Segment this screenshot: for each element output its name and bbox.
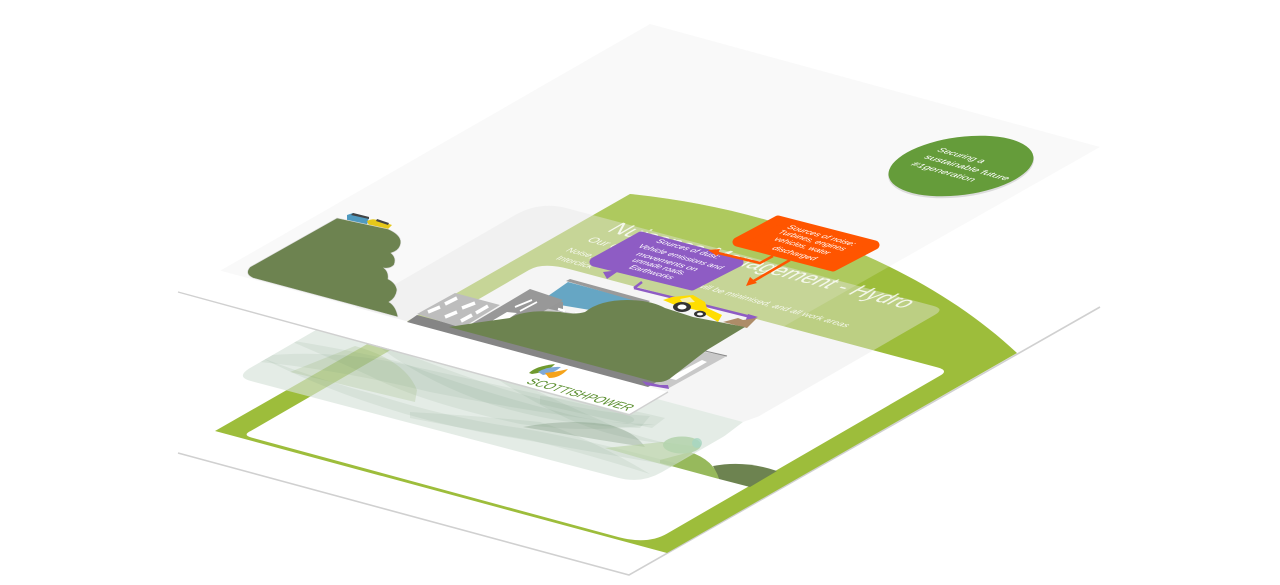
- noise text: Sources of noise:: [784, 224, 859, 248]
- green page layer: [215, 194, 1017, 553]
- ScottishPower logo: [522, 364, 639, 413]
- badge text: Securing a: [934, 147, 989, 165]
- grass panel: [243, 330, 743, 480]
- dust text: Sources of dust:: [653, 238, 723, 260]
- title: Nuisance Management - Hydro: [601, 220, 924, 312]
- orange arrows: [718, 253, 790, 282]
- dust text: [626, 238, 726, 281]
- green layer tint under top sheet: [408, 194, 889, 326]
- dust text: unmade roads.: [629, 257, 689, 277]
- left bush: [248, 218, 401, 317]
- dust text: Earthworks: [626, 264, 677, 281]
- top sheet front edge: [178, 292, 668, 415]
- white content card: [247, 266, 944, 540]
- green circle badge: [884, 128, 1038, 206]
- callout: sources of noise: [737, 220, 875, 267]
- leaf shape left: [290, 346, 417, 402]
- light grey building: [417, 293, 500, 328]
- road: [645, 352, 727, 388]
- grass streaks: [260, 340, 700, 474]
- subheading: Our commit: [584, 236, 655, 259]
- bins behind left bush: [347, 213, 392, 230]
- noise text: vehicles, water: [771, 236, 834, 256]
- noise text: [769, 224, 859, 262]
- water reservoir: [548, 282, 650, 315]
- yellow digger: [663, 295, 722, 322]
- translucent middle panel: [243, 215, 940, 480]
- body text line 2: Interclick: [553, 255, 597, 270]
- top sheet background: [218, 24, 1100, 392]
- hills on green layer: [660, 452, 777, 487]
- white front band of top sheet: [178, 270, 668, 414]
- badge text: [908, 147, 1013, 183]
- panel heading text: [553, 220, 924, 329]
- central bush: [449, 300, 745, 382]
- dust text: Vehicle emissions and: [635, 243, 726, 271]
- bottom page outline: [178, 307, 1100, 575]
- dust text: movements on: [633, 251, 701, 273]
- dark grey building: [466, 289, 563, 332]
- dam wall: [566, 279, 650, 304]
- badge text: #1generation: [908, 161, 979, 183]
- purple site boundary: [634, 288, 755, 318]
- body text line 1: Noise, dust and vibration levels will be minimised, and all work areas: [563, 247, 853, 329]
- logo wordmark: SCOTTISHPOWER: [522, 376, 639, 413]
- logo leaves: [529, 364, 555, 374]
- badge text: sustainable future: [921, 154, 1013, 182]
- rear light building: [528, 307, 590, 332]
- callout: sources of dust: [594, 236, 739, 286]
- leaf shape right: [523, 422, 645, 447]
- light foliage foot: [605, 442, 700, 467]
- noise text: discharged: [769, 245, 820, 262]
- noise text: Turbines, engines: [775, 229, 849, 252]
- purple boundary lower: [642, 381, 669, 389]
- illustration: site scene: [407, 279, 758, 389]
- brown spoil heap: [723, 318, 757, 328]
- ground strip: [407, 315, 660, 387]
